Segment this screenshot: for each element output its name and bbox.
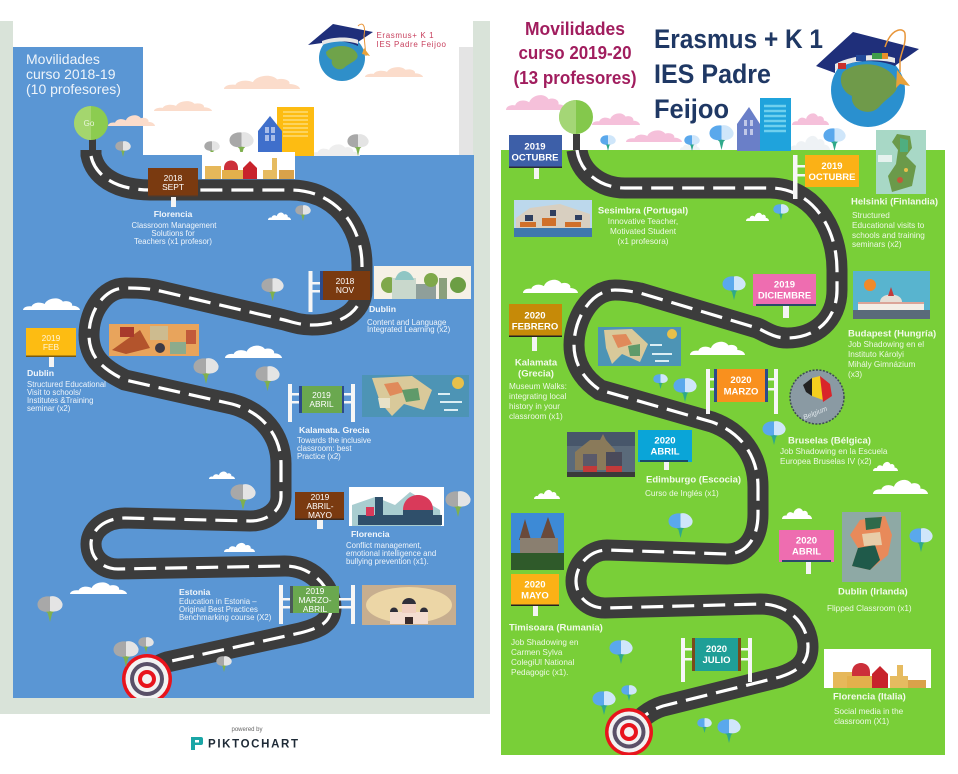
text: Florencia conflict management: Conflict management, (346, 541, 422, 550)
picture: Budapest (853, 271, 930, 319)
text: Bruselas: Bruselas (Bélgica) (788, 436, 871, 446)
sign: 2019 OCTUBRE right: OCTUBRE (809, 172, 855, 183)
trees: sky (600, 125, 846, 151)
text: Florencia classroom management (132, 209, 217, 246)
sign: 2019 OCTUBRE right: 2019 (821, 161, 843, 172)
sign: 2020 ABRIL blue: 2020 (654, 436, 676, 446)
target (122, 654, 172, 698)
title: Erasmus + K1 IES Padre Feijoo (654, 24, 823, 124)
text: Timisoara: ColegiUl National (511, 658, 574, 667)
text: Kalamata Grecia: Kalamata. Grecia (299, 425, 370, 435)
sign: 2018 NOV (308, 271, 370, 312)
decor: tree center (668, 513, 693, 538)
picture: Kalamata map (598, 327, 681, 366)
title: curso 2018-19: (10 profesores) (26, 81, 121, 97)
text: Florencia conflict management: bullying prevention (x1). (346, 557, 429, 566)
picture: Timisoara castle (511, 513, 564, 570)
text: Florencia conflict management: emotional intelligence and (346, 549, 436, 558)
icon: Piktochart logo (191, 737, 203, 750)
sign: 2020 FEBRERO: 2020 (524, 310, 546, 322)
picture: Estonia cathedral (362, 585, 456, 625)
title: Erasmus + K1 IES Padre Feijoo: Erasmus + K 1 (654, 24, 823, 54)
buildings (258, 107, 360, 156)
text: Kalamata: history in your (509, 402, 560, 411)
logo text: IES Padre Feijoo (376, 40, 447, 49)
decor: cloud and tree near Helsinki (746, 204, 789, 221)
footer: powered by Piktochart: PIKTOCHART (208, 738, 300, 750)
text: Dublin content and language (367, 304, 451, 334)
sign: 2019 OCTUBRE left: OCTUBRE (512, 152, 558, 164)
decor: trees near March sign (653, 374, 697, 402)
sign: 2019 MARZO-ABRIL: ABRIL (303, 604, 327, 614)
text: Sesimbra: Sesimbra (Portugal) (598, 206, 688, 216)
text: Helsinki: Educational visits to (852, 221, 925, 230)
text: Kalamata Grecia: classroom: best (297, 444, 352, 453)
text: Kalamata (509, 358, 567, 421)
text: Kalamata: Museum Walks: (509, 382, 567, 391)
text: Dublin structured visit: Institutes &Training (27, 396, 93, 405)
text: Estonia: Education in Estonia – (179, 597, 257, 606)
sign: 2019 OCTUBRE right (793, 155, 859, 199)
sign: 2020 MARZO: 2020 (730, 375, 752, 386)
text: Sesimbra (598, 206, 688, 246)
logo text: Erasmus+ K 1 (376, 31, 434, 40)
sign: 2019 ABRIL: ABRIL (309, 399, 334, 409)
text: Dublin Irlanda: Flipped Classroom (x1) (827, 604, 912, 613)
picture: Edinburgh (567, 432, 635, 477)
footer: powered by Piktochart: powered by (231, 727, 263, 733)
text: Florencia classroom management: Florencia (154, 209, 192, 219)
text: Sesimbra: Innovative Teacher, (608, 217, 678, 226)
text: Estonia: Original Best Practices (179, 605, 258, 614)
picture: Dublin illustration (374, 266, 471, 299)
picture: Dublin map (109, 324, 199, 356)
text: Timisoara (509, 622, 603, 677)
picture: Finland map (876, 130, 926, 194)
text: Dublin structured visit: Structured Educational (27, 380, 106, 389)
text: Florencia Italia: Social media in the (834, 707, 904, 716)
sign: 2019 DICIEMBRE: DICIEMBRE (758, 290, 811, 302)
text: Bruselas (780, 436, 888, 466)
text: Estonia: Estonia (179, 587, 211, 597)
buildings (680, 98, 830, 151)
text: Dublin structured visit: Dublin (27, 368, 54, 378)
text: Florencia Italia: Florencia (Italia) (833, 692, 906, 702)
sign: 2018 SEPT: 2018 (164, 173, 183, 183)
picture: Sesimbra (514, 200, 592, 237)
picture: Florence duomo (349, 487, 444, 526)
text: Budapest: (x3) (848, 370, 862, 379)
decor: clouds and trees upper middle (23, 278, 284, 391)
text: Florencia conflict management (346, 529, 436, 566)
text: Dublin structured visit: seminar (x2) (27, 404, 71, 413)
logo text (376, 31, 447, 49)
sign: 2018 SEPT (148, 168, 198, 207)
text: Estonia: Benchmarking course (X2) (179, 613, 272, 622)
text: Budapest: Budapest (Hungría) (848, 328, 936, 340)
road (574, 150, 837, 732)
text: Timisoara: Pedagogic (x1). (511, 668, 568, 677)
sign: 2018 SEPT: SEPT (162, 182, 184, 192)
clouds: pink sky (506, 95, 829, 142)
text: Helsinki: seminars (x2) (852, 240, 902, 249)
text: Florencia conflict management: Florencia (351, 529, 390, 539)
text: Timisoara: Timisoara (Rumanía) (509, 622, 603, 634)
picture: Kalamata map (362, 375, 469, 417)
sign: 2019 OCTUBRE left (509, 135, 562, 179)
decor: trees bottom (592, 640, 741, 743)
text: Dublin structured visit: Visit to schools/ (27, 388, 82, 397)
sign: 2019 FEB: FEB (43, 342, 60, 352)
text: Helsinki: Structured (852, 211, 890, 220)
text: Bruselas: Job Shadowing en la Escuela (780, 447, 888, 456)
picture: Florencia skyline (202, 152, 295, 179)
text: Sesimbra: (x1 profesora) (618, 237, 669, 246)
text: Helsinki: schools and training (852, 231, 925, 240)
sign: 2019 OCTUBRE left: 2019 (524, 142, 546, 152)
text: Kalamata: (Grecia) (518, 368, 554, 380)
decor: clouds lower (38, 543, 255, 622)
start marker: Go: Go (84, 119, 95, 128)
text: Budapest: Mihály Gimnázium (848, 360, 916, 369)
text: Kalamata Grecia: Towards the inclusive (297, 436, 371, 445)
sign: 2020 JULIO (681, 638, 752, 682)
text: Kalamata: Kalamata (515, 358, 558, 368)
text: Timisoara: Carmen Sylva (511, 648, 563, 657)
sign: 2019 ABRIL-MAYO: 2019 (311, 492, 330, 502)
sign: 2020 MAYO (511, 574, 559, 616)
title: curso 2019-20 (514, 19, 637, 88)
text: Budapest (848, 328, 936, 379)
text: Edimburgo (645, 474, 741, 498)
decor: cloud and tree mid (209, 472, 471, 517)
title: curso 2018-19 (26, 51, 121, 97)
panel: curso 2018-19 (0, 21, 490, 714)
text: Florencia Italia (833, 692, 906, 726)
text: Dublin content and language: Integrated Learning (x2) (367, 325, 451, 334)
sign: 2020 JULIO: 2020 (706, 644, 727, 655)
text: Florencia classroom management: Solutions for (151, 229, 195, 238)
text: Kalamata Grecia (297, 425, 371, 461)
sign: 2020 FEBRERO: FEBRERO (512, 322, 558, 332)
sign: 2019 ABRIL-MAYO: MAYO (308, 510, 333, 520)
text: Helsinki: Helsinki (Finlandia) (851, 196, 938, 208)
sign: 2019 ABRIL-MAYO (295, 492, 344, 529)
road (89, 150, 362, 679)
text: Kalamata: integrating local (509, 392, 567, 401)
text: Estonia (179, 587, 272, 622)
sign: 2018 NOV: 2018 (336, 276, 355, 286)
panel: curso 2019-20 (501, 19, 945, 756)
sign: 2019 FEB (26, 328, 76, 367)
sign: 2020 MARZO: MARZO (724, 386, 758, 398)
decor: tree right (909, 528, 933, 552)
text: Bruselas: Europea Bruselas IV (x2) (780, 457, 872, 466)
sign: 2020 MAYO: MAYO (521, 590, 549, 602)
text: Dublin structured visit (27, 368, 106, 413)
start marker: Go (74, 106, 108, 155)
sign: 2020 ABRIL pink (779, 530, 834, 574)
sign: 2020 MARZO (706, 369, 778, 414)
text: Edimburgo: Edimburgo (Escocia) (646, 474, 741, 486)
sign: 2019 MARZO-ABRIL: MARZO- (298, 595, 332, 605)
clouds: peach sky (108, 67, 423, 126)
title: curso 2019-20: (13 profesores) (514, 68, 637, 88)
text: Timisoara: Job Shadowing en (511, 638, 579, 647)
text: Dublin Irlanda: Dublin (Irlanda) (838, 586, 908, 598)
decor: tree near Bruselas (762, 421, 786, 445)
text: Dublin Irlanda (827, 586, 912, 613)
title: curso 2019-20: Movilidades (525, 19, 625, 39)
title: Erasmus + K1 IES Padre Feijoo: Feijoo (654, 94, 729, 124)
sign: 2019 ABRIL-MAYO: ABRIL- (306, 501, 334, 511)
decor: clouds and tree upper middle (523, 276, 746, 355)
sign: 2020 JULIO: JULIO (703, 655, 730, 666)
text: Florencia Italia: classroom (X1) (834, 717, 889, 726)
sign: 2018 NOV: NOV (336, 285, 354, 295)
sign: 2020 ABRIL pink: 2020 (796, 536, 817, 546)
sign: 2020 FEBRERO (509, 304, 562, 351)
sign: 2020 ABRIL blue: ABRIL (650, 446, 680, 458)
text: Dublin content and language: Content and Language (367, 318, 446, 327)
sign: 2019 ABRIL: 2019 (312, 390, 331, 400)
target (605, 708, 653, 756)
decor: clouds right (534, 462, 928, 519)
text: Florencia classroom management: Classroom Management (132, 221, 217, 230)
icon: Belgium badge: Belgium (802, 406, 829, 422)
title: curso 2018-19: curso 2018-19 (26, 66, 116, 82)
sign: 2019 MARZO-ABRIL: 2019 (306, 586, 325, 596)
title: curso 2019-20: curso 2019-20 (518, 43, 632, 63)
sign: 2020 ABRIL pink: ABRIL (792, 546, 821, 558)
title: curso 2018-19: Movilidades (26, 51, 100, 67)
picture: Florencia skyline (824, 649, 931, 688)
picture: Ireland map (842, 512, 901, 582)
decor: cloud and tree near Florencia (268, 205, 311, 221)
decor: trees by target (114, 637, 232, 672)
sign: 2019 DICIEMBRE (753, 274, 816, 318)
sign: 2019 DICIEMBRE: 2019 (774, 280, 795, 290)
text: Kalamata Grecia: Practice (x2) (297, 452, 341, 461)
sign: 2020 ABRIL blue (638, 430, 692, 470)
trees: sky (115, 132, 369, 157)
text: Budapest: Instituto Károlyi (848, 350, 904, 359)
title: Erasmus + K1 IES Padre Feijoo: IES Padre (654, 59, 771, 89)
text: Sesimbra: Motivated Student (610, 227, 677, 236)
start marker: tree (559, 100, 593, 150)
text: Kalamata: classroom (x1) (509, 412, 563, 421)
sign: 2019 MARZO-ABRIL (279, 585, 355, 624)
sign: 2019 FEB: 2019 (42, 333, 61, 343)
text: Budapest: Job Shadowing en el (848, 340, 924, 349)
text: Florencia classroom management: Teachers (x1 profesor) (134, 237, 212, 246)
text: Helsinki (851, 196, 938, 249)
logo: globe with graduation cap (816, 30, 919, 127)
text: Edimburgo: Curso de Inglés (x1) (645, 489, 719, 498)
text: Dublin content and language: Dublin (369, 304, 396, 314)
icon: Belgium badge (790, 370, 844, 424)
logo: globe with graduation cap (308, 24, 373, 81)
sign: 2020 MAYO: 2020 (524, 580, 546, 590)
footer: powered by Piktochart (191, 727, 300, 750)
sign: 2019 ABRIL (288, 384, 355, 422)
